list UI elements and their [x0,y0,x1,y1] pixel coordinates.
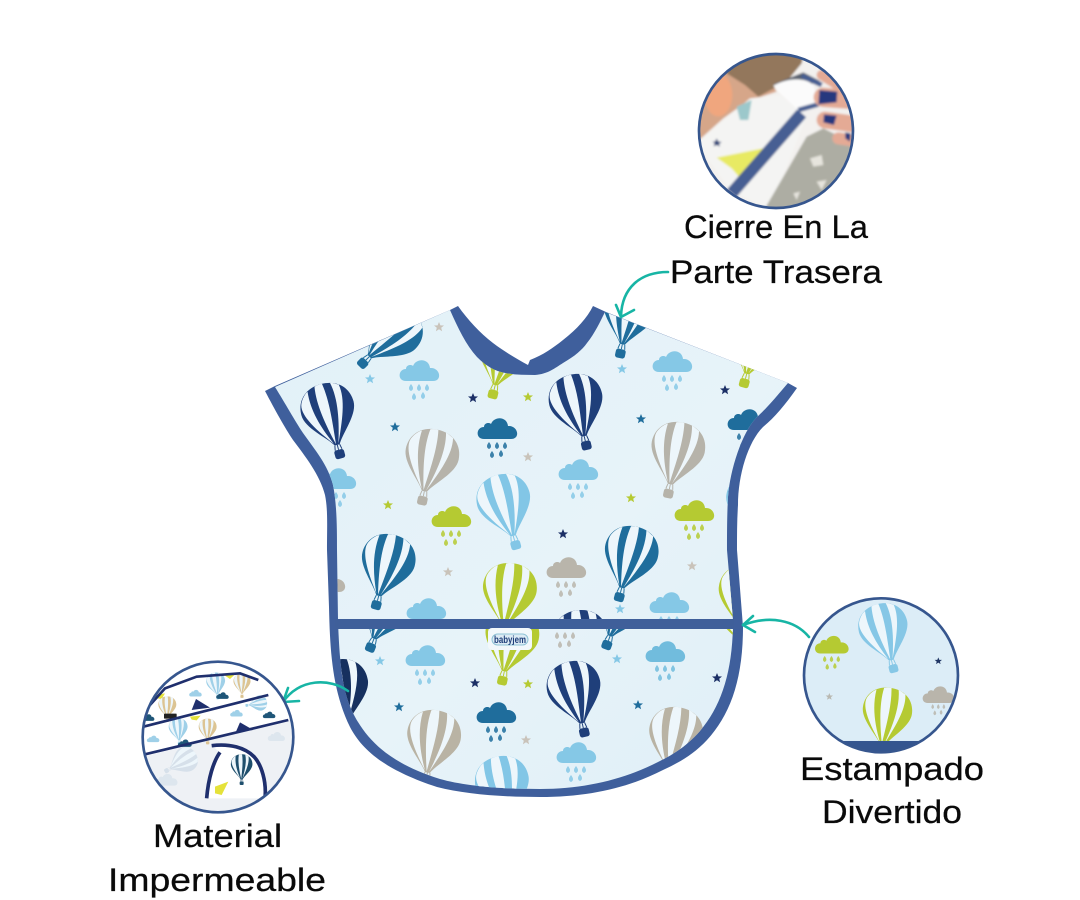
label: back closure: Parte Trasera [670,254,882,290]
callout circle: back closure photo [698,52,854,210]
lime balloon [862,688,912,741]
faded clouds [158,774,178,786]
knot straps [798,76,822,110]
blue binding [732,113,802,193]
light blue balloon [858,603,908,674]
print on panels [142,671,275,747]
callout circle: fun print photo [802,597,960,754]
label: fun print [800,751,984,830]
label: waterproof material: Impermeable [108,862,326,898]
brand label [488,628,532,650]
nails [818,90,851,142]
label: back closure: Cierre En La [684,209,868,245]
lime drops [823,656,840,670]
arrow: to neck closure [616,272,668,317]
tied knot [773,79,819,111]
gray pillow [766,127,850,207]
label: fun print: Estampado [800,751,984,787]
gray cloud [923,686,954,703]
binding strip [828,741,935,758]
label: waterproof material: Material [153,818,282,854]
small star [713,138,722,147]
gray drops [931,704,945,715]
neck skin [700,72,778,140]
bib binding outline [265,306,797,797]
teal print [737,100,752,120]
clouds in pocket [406,632,685,782]
label: fun print: Divertido [822,794,962,830]
bib fabric [275,310,788,789]
stars [365,322,730,744]
bib product illustration [265,306,797,797]
dark collar [774,71,820,85]
navy star [935,657,942,664]
pillow stars [793,155,827,200]
lime print [716,148,764,178]
label: waterproof material [108,818,326,898]
top fabric panel [143,672,268,727]
arrow: to material [283,682,348,702]
panel bindings [143,673,288,754]
print pattern [295,277,789,837]
balloons above pocket [300,312,754,619]
label: back closure [670,209,882,290]
bib back [745,96,760,103]
fingers [822,75,860,142]
second fabric panel [143,695,288,753]
pocket band [335,619,734,629]
faded balloon [164,747,198,774]
ear [704,74,732,116]
pocket flap [207,745,265,798]
arrow: to pocket print [743,616,809,637]
gray star [826,693,833,700]
clouds [329,351,758,619]
balloons below pocket [340,629,733,789]
hair [726,55,804,97]
infographic canvas [111,52,983,898]
bottom fabric [146,720,292,811]
callout circle: waterproof material photo [141,660,295,814]
lime cloud [815,636,849,653]
brand label: babyjem [494,635,526,646]
